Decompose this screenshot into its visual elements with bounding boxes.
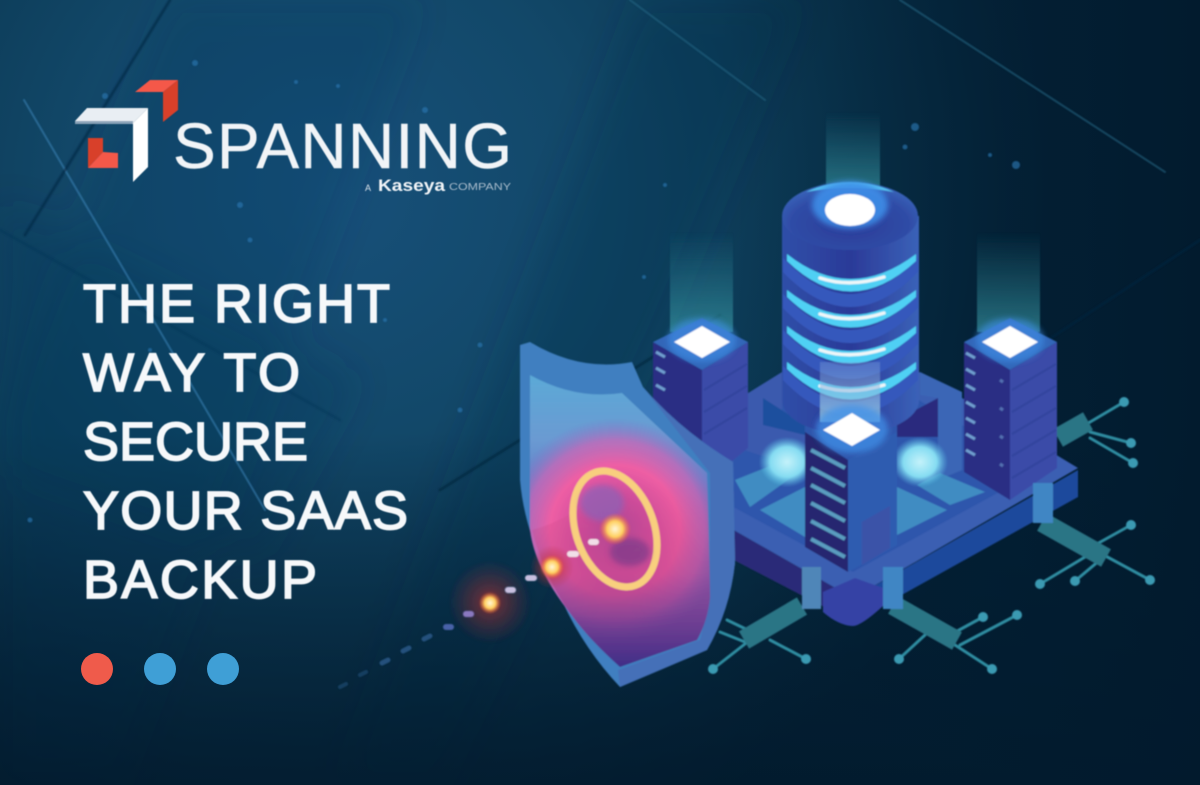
central database cylinder [782, 181, 919, 434]
target ring [558, 459, 672, 599]
heading: THE RIGHT [83, 274, 390, 334]
platform top [628, 332, 1078, 598]
heading: BACKUP [83, 550, 317, 610]
light beams [670, 112, 1040, 332]
attack trail: glowing dots and dashes [340, 513, 631, 687]
right server tower [964, 318, 1057, 500]
tagline: A Kaseya Company: A [365, 183, 371, 193]
floor tiles [735, 462, 985, 537]
tagline: A Kaseya Company: COMPANY [449, 182, 511, 193]
platform [628, 332, 1078, 622]
icon: logo mark [75, 80, 178, 182]
wordmark: SPANNING [173, 110, 512, 182]
tagline: A Kaseya Company [365, 176, 511, 195]
heading: WAY TO [83, 343, 300, 403]
pagination dots [81, 653, 239, 685]
platform sides [853, 470, 1078, 622]
left server tower [653, 318, 748, 486]
shield [520, 342, 735, 687]
glow spots [759, 437, 815, 487]
illustration: data centre [340, 112, 1155, 687]
logo: Spanning [75, 80, 512, 195]
tagline: A Kaseya Company: Kaseya [378, 176, 446, 195]
heading: SECURE [83, 412, 308, 472]
disk rings [783, 254, 918, 415]
circuit traces [708, 397, 1155, 674]
shield inner face [530, 375, 710, 667]
front server tower [805, 362, 897, 572]
heading [83, 274, 408, 610]
heading: YOUR SAAS [83, 481, 408, 541]
platform feet [802, 483, 1053, 626]
